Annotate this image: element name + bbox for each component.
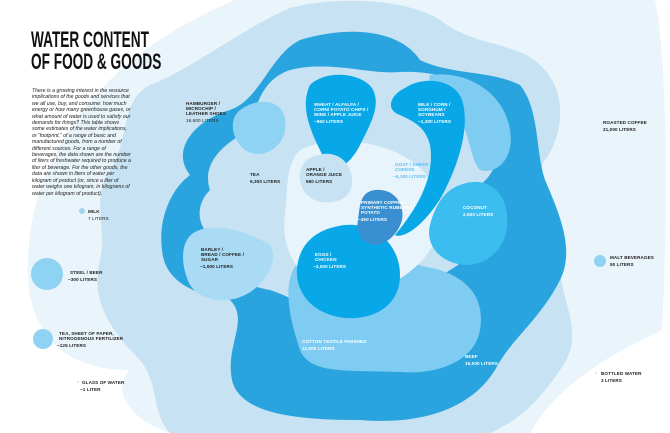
dot: glass of water <box>77 381 79 383</box>
label: coconut: COCONUT <box>463 205 487 210</box>
label: milk corn: SOYBEANS <box>418 112 445 117</box>
label: milk corn: SORGHUM / <box>418 107 446 112</box>
label: roasted coffee: ROASTED COFFEE <box>603 120 647 125</box>
label: tea paper: TEA, SHEET OF PAPER, <box>59 331 114 336</box>
shape: eggs drop <box>297 225 400 318</box>
label: coconut: 2,500 LITERS <box>463 212 493 217</box>
label: apple juice: ORANGE JUICE <box>306 172 342 177</box>
label: hamburger: MICROCHIP / <box>186 106 216 111</box>
label: barley: SUGAR <box>201 257 219 262</box>
shape: milk/corn drop <box>391 81 465 236</box>
circle: milk 7 liters <box>79 208 85 214</box>
blob: tea lobe cyan <box>233 102 286 154</box>
shape: primary copper drop <box>357 190 403 245</box>
blob: barley <box>183 228 273 300</box>
label: steel beer: ~300 LITERS <box>68 277 97 282</box>
label: hamburger: 16,600 LITERS <box>186 118 219 123</box>
label: milk corn: MILK / CORN / <box>418 102 450 107</box>
blob: tea (inner light) <box>200 67 499 320</box>
shape: wheat drop <box>306 75 376 167</box>
label: glass of water: GLASS OF WATER <box>82 380 124 385</box>
label: eggs: EGGS / <box>315 252 331 257</box>
circle: steel beer <box>31 258 63 290</box>
label: primary copper: POTATO <box>361 210 380 215</box>
circle: tea shirt <box>33 329 53 349</box>
label: apple juice: APPLE / <box>306 167 325 172</box>
blob: cotton textile (light cyan) <box>288 256 481 372</box>
label: wheat: ~960 LITERS <box>314 119 343 124</box>
label: goat: CHEESE <box>395 167 414 172</box>
label: malt: MALT BEVERAGES <box>610 255 654 260</box>
label: bottled water: BOTTLED WATER <box>601 371 642 376</box>
label: roasted coffee: 21,000 LITERS <box>603 127 636 132</box>
labels <box>57 101 654 392</box>
title: WATER CONTENT <box>31 27 149 52</box>
label: beef: 15,000 LITERS <box>465 361 498 366</box>
label: barley: BREAD / COFFEE / <box>201 252 245 257</box>
label: wheat: WHEAT / ALFALFA / <box>314 102 359 107</box>
label: wheat: WINE / APPLE JUICE <box>314 112 362 117</box>
label: milk corn: ~1,300 LITERS <box>418 119 451 124</box>
label: barley: ~1,500 LITERS <box>200 264 233 269</box>
label: barley: BARLEY / <box>201 247 223 252</box>
label: steel beer: STEEL / BEER <box>70 270 103 275</box>
blob: hamburger (light) <box>97 1 572 433</box>
title <box>31 27 161 74</box>
label: malt: 50 LITERS <box>610 262 634 267</box>
label: primary copper: SYNTHETIC RUBBER / <box>361 205 413 210</box>
circle: malt beverages <box>594 255 606 267</box>
label: milk: MILK <box>88 209 100 214</box>
label: beef: BEEF <box>465 354 478 359</box>
label: tea paper: NITROGENOUS FERTILIZER <box>59 336 124 341</box>
label: wheat: CORN/ POTATO CHIPS / <box>314 107 369 112</box>
label: tea: TEA <box>250 172 260 177</box>
label: hamburger: LEATHER SHOES <box>186 111 226 116</box>
label: cotton: COTTON TEXTILE FINISHED <box>302 339 366 344</box>
shape: coconut drop <box>429 182 507 265</box>
label: goat: GOAT / SHEEP / <box>395 162 431 167</box>
label: eggs: ~3,500 LITERS <box>313 264 346 269</box>
label: primary copper: ~450 LITERS <box>358 217 387 222</box>
label: eggs: CHICKEN <box>315 257 337 262</box>
label: hamburger: HAMBURGER / <box>186 101 220 106</box>
label: glass of water: ~1 LITER <box>80 387 101 392</box>
label: goat: ~6,100 LITERS <box>393 174 426 179</box>
label: bottled water: 3 LITERS <box>601 378 622 383</box>
label: primary copper: PRIMARY COPPER / <box>361 200 407 205</box>
dot: bottled water <box>595 372 597 374</box>
shape: apple juice circle <box>300 154 352 203</box>
label: milk: 7 LITERS <box>88 216 109 221</box>
blob: beef (medium) <box>161 32 566 421</box>
text block: intro: There is a growing interest in the resource implications of the goods and services that we all use, buy, and consume: how much energy or how many greenhouse gases, or what amount of water is used to satisfy our demands for things? This table shows some estimates of the water implications, or “footprint,” of a range of basic and manufactured goods, from a number of different sources. For a range of beverages, the data shown are the number of liters of freshwater required to produce a liter of beverage. For the other goods, the data are shown in liters of water per kilogram of product (or, since a liter of water weighs one kilogram, in kilograms of water per kilogram of product). <box>32 88 131 196</box>
label: cotton: 11,000 LITERS <box>302 346 335 351</box>
blob: right cyan band <box>429 74 511 171</box>
blob: center pale <box>284 141 440 293</box>
label: apple juice: 650 LITERS <box>306 179 332 184</box>
label: tea paper: ~125 LITERS <box>57 343 86 348</box>
title: OF FOOD & GOODS <box>31 49 161 74</box>
label: tea: 9,300 LITERS <box>250 179 280 184</box>
